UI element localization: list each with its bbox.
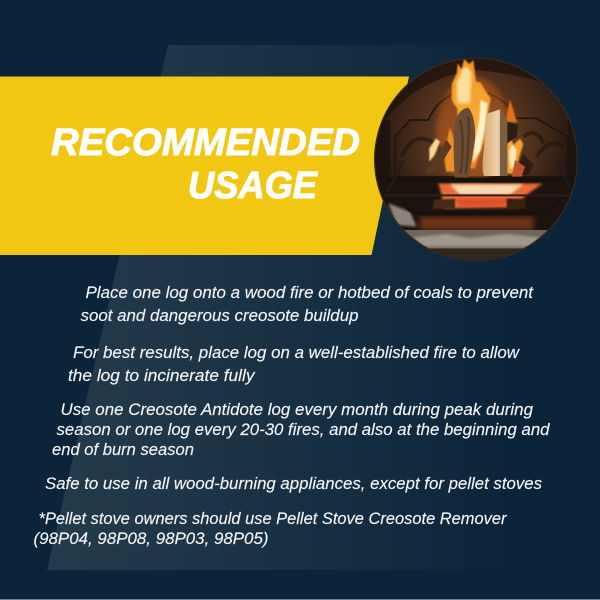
title: RECOMMENDED [51,122,360,164]
left ash pile [388,203,417,227]
logs [454,108,475,178]
iron grate [384,162,573,213]
fireplace photo circle [370,53,583,267]
fireplace back wall [386,70,568,176]
ash floor [404,230,548,249]
paragraph: frequency of use: Use one Creosote Antidote log every month during peak during [60,400,534,419]
paragraph: safe to use: Safe to use in all wood-burning appliances, except for pellet stoves [45,474,542,493]
yellow title banner [0,76,409,255]
title: USAGE [188,165,319,207]
paragraph: best results [68,343,521,385]
cast iron fire back [395,88,567,177]
paragraph: frequency of use: season or one log every 20-30 fires, and also at the beginning and [56,420,550,439]
paragraph: pellet stove note: *Pellet stove owners should use Pellet Stove Creosote Remover [38,509,508,528]
arch shadow [384,58,540,120]
paragraph: frequency of use [52,400,550,459]
paragraph: pellet stove note [34,509,508,548]
paragraph: place one log: soot and dangerous creosote buildup [80,306,358,325]
flame glow [437,77,510,183]
paragraph: best results: the log to incinerate fully [68,366,256,385]
paragraph: place one log: Place one log onto a wood fire or hotbed of coals to prevent [86,283,534,302]
title [51,122,360,207]
flames [452,59,491,168]
paragraph: place one log [80,283,534,325]
paragraph: frequency of use: end of burn season [52,440,194,459]
paragraph: pellet stove note: (98P04, 98P08, 98P03, 98P05) [34,529,268,548]
embers [438,183,543,208]
dark hearth band [378,176,573,230]
paragraph: best results: For best results, place log on a well-established fire to allow [73,343,521,362]
